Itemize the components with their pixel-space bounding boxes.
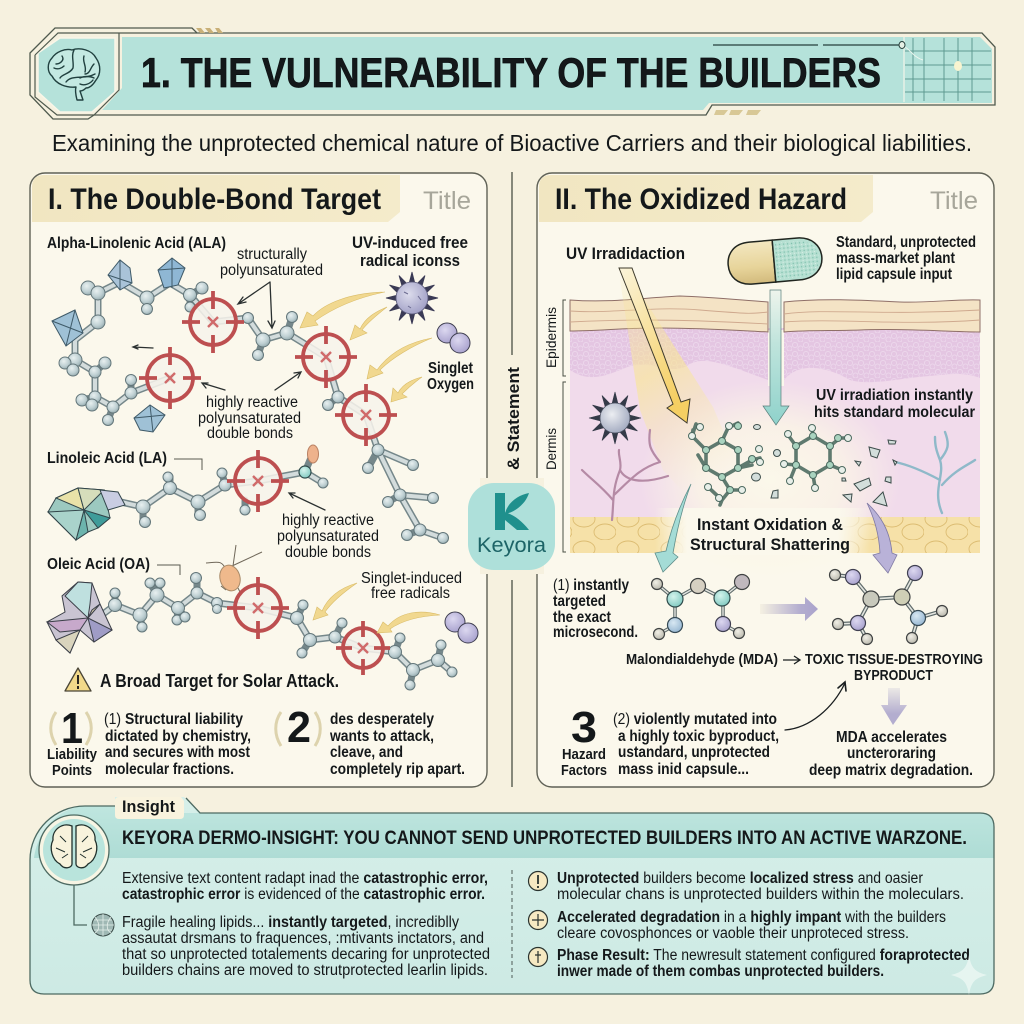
annotation: structurally polyunsaturated — [220, 246, 323, 279]
capsule description — [836, 234, 976, 283]
stratum corneum — [570, 296, 980, 332]
panel: Insight — [30, 797, 994, 995]
header teal band — [102, 37, 992, 110]
UV light beam — [620, 280, 740, 510]
arrow: purple to degradation — [881, 688, 907, 725]
insight left text — [122, 870, 490, 979]
panel I heading — [32, 175, 471, 222]
insight heading band — [34, 806, 994, 858]
molecule: toxic byproduct — [830, 566, 948, 644]
icon: brain — [48, 49, 100, 100]
hazard factors: Hazard — [562, 746, 606, 763]
Keyora logo — [468, 478, 555, 574]
UV hit statement: hits standard molecular — [814, 404, 975, 421]
step text 1: (1) instantly — [553, 577, 629, 594]
MDA caption — [626, 651, 983, 684]
header title: 1. THE VULNERABILITY OF THE BUILDERS — [141, 49, 881, 96]
panel I heading: Title — [423, 187, 471, 215]
fat layer — [570, 517, 980, 553]
target reticle 3 — [139, 347, 201, 409]
icon: insect-like contaminant — [206, 545, 262, 593]
hazard factors: a highly toxic byproduct, — [618, 728, 779, 745]
annotation: reactive bonds lower: double bonds — [285, 544, 371, 561]
hazard factors: mass inid capsule... — [618, 761, 749, 778]
Keyora logo: Keyora — [477, 534, 546, 557]
MDA caption: TOXIC TISSUE-DESTROYING — [805, 651, 983, 668]
annotation: singlet-induced radicals: Singlet-induced — [361, 570, 462, 587]
skin cross-section diagram — [570, 280, 980, 580]
degradation result: MDA accelerates — [836, 729, 947, 746]
molecule: LA chain — [48, 445, 328, 540]
oxidising molecule 2 — [780, 424, 852, 492]
insight tag: Insight — [122, 797, 175, 816]
atoms — [108, 572, 457, 690]
icon: singlet oxygen — [437, 323, 470, 353]
warning callout — [65, 668, 339, 691]
UV hit statement — [814, 387, 975, 421]
molecule: OA chain — [47, 572, 457, 690]
brain icon box — [30, 28, 995, 119]
UV hit statement: UV irradiation instantly — [816, 387, 973, 404]
annotation: singlet oxygen — [427, 360, 474, 393]
capsule description: Standard, unprotected — [836, 234, 976, 251]
dermis layer — [570, 359, 980, 553]
orange functional group — [308, 445, 318, 463]
insight point 1: Unprotected builders become localized stress and oasier — [557, 870, 923, 887]
target reticle 1 — [182, 291, 244, 353]
annotation: reactive bonds lower: highly reactive — [282, 512, 374, 529]
vertical statement text: & Statement — [504, 367, 523, 470]
icon: singlet oxygen lower — [445, 612, 478, 643]
target reticle 2 — [295, 326, 357, 388]
molecule: MDA — [652, 574, 750, 640]
MDA caption: Malondialdehyde (MDA) — [626, 651, 778, 668]
instant oxidation heading — [690, 515, 850, 554]
liability point 1: Points — [52, 762, 92, 779]
step text 1 — [553, 577, 638, 641]
target reticle 6 — [227, 577, 289, 639]
panel II heading: II. The Oxidized Hazard — [555, 183, 847, 216]
liability point 2: 2 — [287, 703, 311, 752]
hazard factors: Factors — [561, 762, 607, 779]
arrow: capsule delivery — [763, 290, 789, 425]
liability point 1: Liability — [47, 746, 98, 763]
degradation result — [809, 729, 973, 779]
insight point 1 — [528, 870, 964, 903]
icon: free radical in dermis — [589, 392, 641, 444]
arrow: purple down — [867, 503, 897, 573]
insight point 2 — [528, 909, 946, 942]
epidermis layer — [570, 328, 980, 382]
target reticle 5 — [227, 450, 289, 512]
molecule labels: Alpha-Linolenic Acid (ALA) — [47, 235, 226, 252]
insight point 3: inwer made of them combas unprotected builders. — [557, 963, 884, 980]
crystal: OA — [47, 582, 112, 653]
liability point 2: completely rip apart. — [330, 761, 465, 778]
liability point 1: 1 — [61, 704, 83, 753]
liability point 1: molecular fractions. — [105, 761, 234, 778]
annotation: reactive bonds lower: polyunsaturated — [277, 528, 379, 545]
insight left text: assautat drsmans to fraquences, :mtivants inctators, and — [122, 930, 484, 947]
icon: lipid capsule — [726, 236, 824, 286]
annotation: singlet oxygen: Singlet — [428, 360, 474, 377]
annotation: structurally polyunsaturated: structurally — [237, 246, 307, 263]
annotation: reactive bonds upper: highly reactive — [206, 394, 298, 411]
insight point 1: molecular chans is unprotected builders within the moleculars. — [557, 886, 964, 903]
insight left text: that so unprotected totalements decaring for unprotected — [122, 946, 490, 963]
label: UV irradiation: UV Irradidaction — [566, 244, 685, 263]
oxidising molecule 1 — [688, 422, 764, 505]
arrow: teal down — [655, 484, 691, 572]
liability point 1 — [47, 704, 251, 779]
panel II heading — [539, 175, 978, 222]
degradation result: deep matrix degradation. — [809, 762, 973, 779]
insight left text: builders chains are moved to strutprotected learlin lipids. — [122, 962, 488, 979]
insight left text: catastrophic error is evidenced of the catastrophic error. — [122, 886, 485, 903]
hazard factors: 3 — [571, 703, 597, 752]
header banner — [30, 28, 995, 119]
yellow attack arrows — [300, 292, 440, 633]
atoms — [59, 281, 448, 544]
molecule: ALA chain — [52, 258, 448, 544]
capsule description: mass-market plant — [836, 250, 955, 267]
instant oxidation heading: Structural Shattering — [690, 535, 850, 554]
liability point 1: and secures with most — [105, 744, 251, 761]
annotation: UV-induced free radicals — [352, 233, 468, 270]
liability point 1: dictated by chemistry, — [105, 728, 251, 745]
arrow: MDA to byproduct — [760, 597, 818, 621]
panel: II. The Oxidized Hazard — [537, 173, 994, 787]
molecule labels — [47, 235, 226, 573]
instant oxidation heading: Instant Oxidation & — [697, 515, 843, 534]
annotation: singlet-induced radicals: free radicals — [371, 585, 450, 602]
step text 1: targeted — [553, 593, 606, 610]
panel: I. The Double-Bond Target — [30, 173, 487, 787]
warning callout: A Broad Target for Solar Attack. — [100, 671, 339, 691]
annotation: UV-induced free radicals: UV-induced free — [352, 233, 468, 252]
header schematic grid — [713, 37, 991, 102]
insight left text: Fragile healing lipids... instantly targeted, incrediblly — [122, 914, 459, 931]
annotation: reactive bonds upper: double bonds — [207, 425, 293, 442]
subtitle: Examining the unprotected chemical nature of Bioactive Carriers and their biological liabilities. — [52, 130, 972, 156]
insight point 2: Accelerated degradation in a highly impant with the builders — [557, 909, 946, 926]
insight tag — [115, 797, 184, 819]
arrow: UV ray — [619, 268, 690, 423]
icon: brain medallion — [39, 815, 109, 885]
central fade — [640, 380, 900, 580]
skin bracket labels — [543, 300, 566, 552]
annotation: reactive bonds lower — [277, 512, 379, 561]
annotation: singlet-induced radicals — [361, 570, 462, 602]
molecule labels: Oleic Acid (OA) — [47, 556, 150, 573]
target reticle 4 — [335, 384, 397, 446]
skin bracket labels: Dermis — [543, 428, 559, 470]
liability point 2 — [276, 703, 465, 778]
step text 1: microsecond. — [553, 624, 638, 641]
insight point 2: cleare covosphonces or vaoble their unproteced stress. — [557, 925, 909, 942]
insight point 3: Phase Result: The newresult statement configured foraprotected — [557, 947, 970, 964]
black callout arrows — [133, 282, 325, 575]
MDA caption: BYPRODUCT — [854, 667, 933, 684]
crystal: LA — [48, 488, 125, 540]
annotation: singlet oxygen: Oxygen — [427, 376, 474, 393]
icon: lipid globe — [92, 914, 114, 936]
liability point 2: cleave, and — [330, 744, 403, 761]
hazard factors: (2) violently mutated into — [613, 711, 777, 728]
hazard factors — [561, 703, 779, 779]
liability point 2: des desperately — [330, 711, 434, 728]
curved pointer arrow — [785, 682, 846, 730]
panel I heading: I. The Double-Bond Target — [48, 183, 381, 216]
insight left text: Extensive text content radapt inad the catastrophic error, — [122, 870, 488, 887]
step text 1: the exact — [553, 609, 611, 626]
molecule labels: Linoleic Acid (LA) — [47, 450, 167, 467]
connector — [74, 885, 87, 925]
skin bracket labels: Epidermis — [543, 307, 559, 368]
liability point 2: wants to attack, — [329, 728, 434, 745]
annotation: reactive bonds upper — [198, 394, 301, 442]
atoms — [136, 466, 328, 528]
hazard factors: ustandard, unprotected — [618, 744, 770, 761]
annotation: reactive bonds upper: polyunsaturated — [198, 410, 301, 427]
panel II heading: Title — [930, 187, 978, 215]
target reticle 7 — [336, 621, 390, 675]
liability point 1: (1) Structural liability — [104, 711, 243, 728]
sparkle decoration — [951, 955, 987, 995]
capsule description: lipid capsule input — [836, 266, 952, 283]
header deco ticks — [196, 28, 761, 115]
annotation: UV-induced free radicals: radical iconss — [360, 251, 460, 270]
icon: UV free radical — [386, 272, 438, 324]
degradation result: uncteroraring — [847, 745, 936, 762]
annotation: structurally polyunsaturated: polyunsaturated — [220, 262, 323, 279]
shattered fragments — [752, 424, 897, 506]
vessels — [582, 430, 975, 520]
insight point 3 — [528, 947, 970, 980]
crystals — [52, 258, 185, 432]
